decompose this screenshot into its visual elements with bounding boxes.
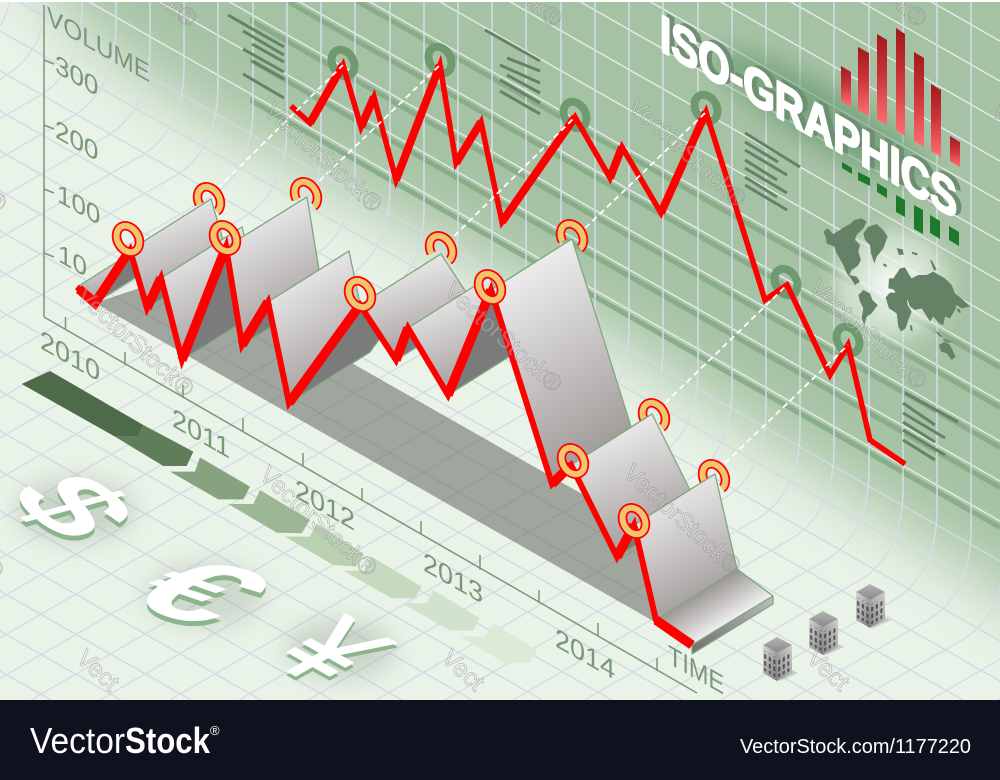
axis labels [40, 1, 724, 701]
currency icon: euro: € [94, 540, 308, 642]
label 10: 10 [58, 238, 87, 283]
watermarks: VectorStock® [259, 98, 387, 218]
watermarks: VectorStock® [618, 460, 746, 580]
title ISO-GRAPHICS [660, 2, 962, 230]
watermarks: VectorStock® [71, 283, 199, 403]
time axis [44, 317, 697, 693]
label time: TIME [668, 640, 724, 701]
text block 1 [228, 15, 284, 98]
text block 2 [485, 30, 540, 114]
eurasia [888, 267, 970, 325]
front ring markers [112, 221, 650, 538]
currency icon: yen: ¥ [241, 604, 421, 706]
world map [823, 218, 970, 360]
vertical axis [44, 5, 54, 317]
folded 3D ribbon chart [77, 197, 773, 654]
isometric building 1 [763, 637, 798, 682]
footer logo: ® [210, 723, 220, 738]
australia [939, 342, 956, 360]
dashed connector lines [218, 65, 848, 470]
text block 3 [745, 133, 800, 210]
isometric building 3 [856, 584, 891, 629]
label 100: 100 [57, 178, 100, 231]
back ring markers [193, 178, 730, 494]
south america [858, 290, 878, 325]
green logo bars [842, 162, 959, 246]
isometric building 2 [809, 611, 844, 656]
label 2014: 2014 [555, 623, 615, 687]
footer logo: VectorStock [30, 720, 223, 761]
label 2011: 2011 [172, 403, 230, 466]
wall rings [327, 43, 864, 357]
floor shadow of chart [95, 271, 705, 622]
north america [823, 218, 867, 285]
footer bar [0, 700, 1000, 780]
currency icon: yen: ¥ [241, 600, 421, 702]
watermarks: VectorStock® [439, 278, 567, 398]
islands [883, 248, 961, 343]
watermarks: Vect [801, 645, 854, 697]
watermarks: Vect [71, 645, 124, 697]
africa [886, 293, 912, 332]
label 2013: 2013 [423, 547, 483, 611]
timeline arrow strip [22, 371, 537, 663]
currency icon: euro: € [94, 545, 308, 647]
label volume: VOLUME [47, 1, 150, 88]
red logo bars [841, 28, 960, 167]
label 2012: 2012 [295, 474, 355, 538]
watermarks: VectorStock® [804, 275, 932, 395]
label 300: 300 [55, 49, 98, 102]
footer image id: VectorStock.com/1177220 [740, 736, 971, 758]
title glow [703, 31, 947, 205]
front red line chart [77, 247, 692, 645]
greenland [863, 224, 888, 263]
world map glow [811, 207, 975, 363]
watermarks: Vect [436, 645, 489, 697]
wall white lines running down-right [0, 0, 1000, 521]
wall red line chart [291, 65, 905, 464]
label 2010: 2010 [40, 325, 100, 389]
top white edge [0, 0, 1000, 2]
label 200: 200 [55, 114, 98, 167]
watermarks: VectorStock® [254, 462, 382, 582]
wall bands [250, 2, 1000, 530]
text block 4 [903, 393, 958, 460]
watermarks: VectorStock® [623, 93, 751, 213]
